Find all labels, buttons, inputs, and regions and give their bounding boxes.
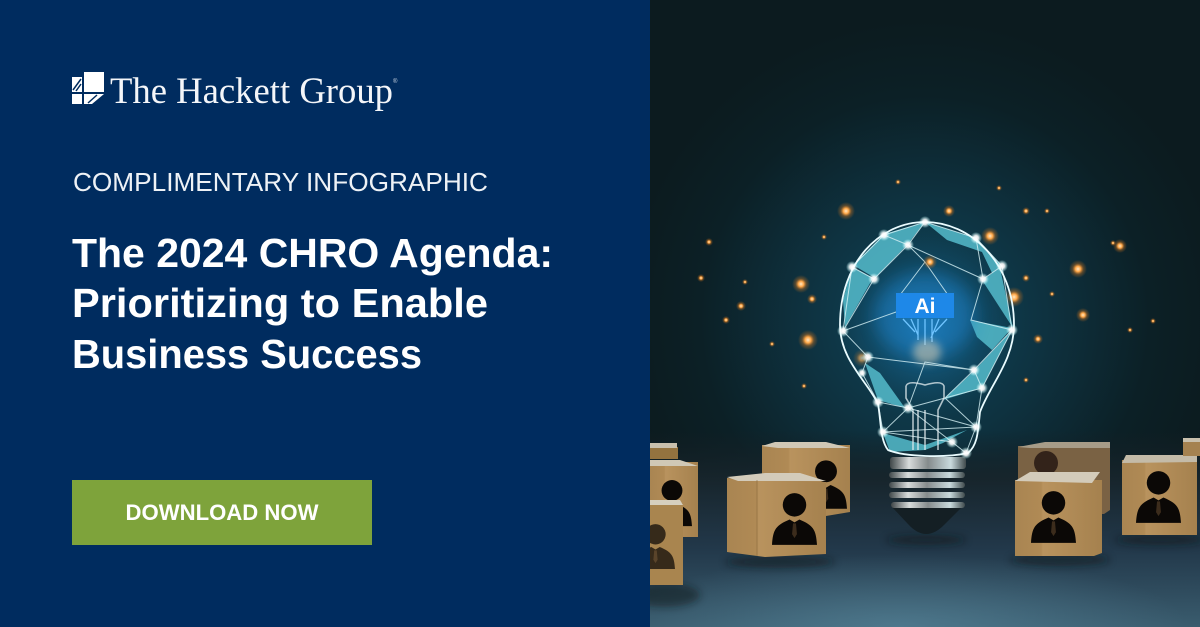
floating orange sparks — [697, 179, 1156, 389]
heading: The 2024 CHRO Agenda: — [72, 230, 553, 276]
block: far left top — [650, 443, 678, 459]
glass outline — [840, 222, 1014, 456]
dark background — [650, 0, 1200, 473]
Ai chip label: Ai — [914, 295, 936, 318]
floor — [650, 450, 1200, 627]
block: front right — [1015, 472, 1102, 556]
light bulb — [837, 216, 1018, 534]
download button: DOWNLOAD NOW — [126, 500, 319, 525]
eyebrow: complimentary infographic: COMPLIMENTARY INFOGRAPHIC — [73, 167, 488, 197]
wordmark: The Hackett Group — [110, 70, 393, 111]
download button — [72, 480, 372, 545]
block: front left edge — [650, 500, 683, 585]
block shadows — [630, 535, 1200, 607]
block: right — [1122, 455, 1197, 535]
filament stem — [906, 383, 944, 450]
block: left — [650, 460, 698, 537]
icon: logo squares — [72, 72, 104, 104]
block: back centre-left — [762, 442, 850, 516]
Ai chip label — [896, 293, 954, 318]
network lines — [843, 222, 1012, 453]
photo panel: AI light bulb with wooden blocks — [630, 0, 1200, 627]
glowing nodes — [837, 216, 1018, 459]
heading: Prioritizing to Enable — [72, 280, 488, 326]
wooden blocks — [636, 438, 1200, 585]
heading — [72, 230, 553, 377]
logo: The Hackett Group — [72, 70, 398, 111]
registered mark: ® — [393, 78, 398, 85]
block: front centre-left — [727, 473, 826, 557]
heading: Business Success — [72, 331, 422, 377]
bulb glass interior — [846, 247, 1012, 406]
teal facets — [843, 222, 1013, 452]
orange core spark — [924, 256, 936, 268]
block: far right top — [1183, 438, 1200, 456]
block: back right — [1018, 442, 1110, 514]
left navy panel — [0, 0, 650, 627]
neural brain glow — [875, 273, 975, 364]
bulb screw base — [889, 457, 966, 534]
